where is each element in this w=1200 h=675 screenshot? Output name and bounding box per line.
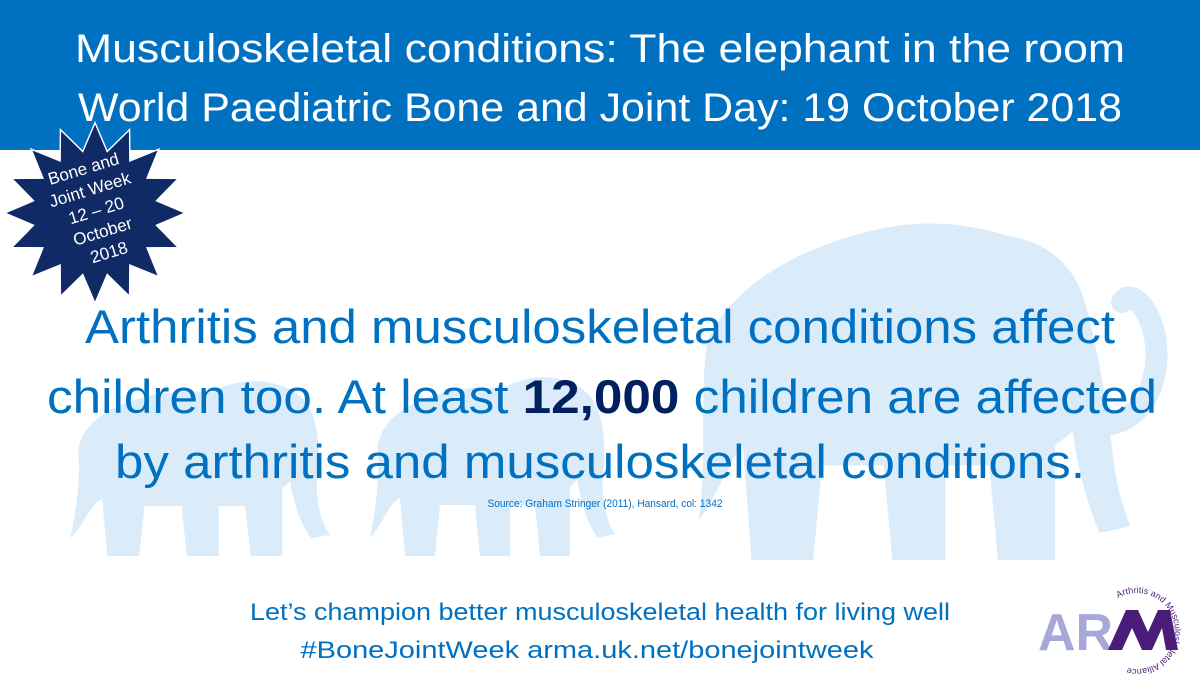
main statement: by arthritis and musculoskeletal conditions. [115,435,1085,488]
title line 1: Musculoskeletal conditions: The elephant in the room [75,27,1125,71]
badge text: Bone and [46,149,121,189]
footer text: Let’s champion better musculoskeletal health for living well [250,599,950,626]
badge text [40,147,153,274]
elephants background [70,224,1156,560]
small elephant [70,381,330,556]
badge text: 12 – 20 [66,193,126,228]
main statement: children too. At least 12,000 children are affected [47,370,1157,423]
footer text: #BoneJointWeek arma.uk.net/bonejointweek [300,637,875,664]
main statement: Arthritis and musculoskeletal conditions affect [85,300,1115,353]
badge text: Joint Week [47,168,133,211]
logo: ARMA: AR [1038,604,1113,662]
medium elephant [370,377,615,556]
badge: starburst [5,123,185,303]
footer text [250,599,950,664]
badge text: 2018 [88,238,130,267]
logo: ARMA: Arthritis and Musculoskeletal Alliance [1118,586,1182,674]
logo: ARMA [1038,586,1182,674]
big elephant [699,224,1156,560]
main statement [47,300,1157,488]
source note: Source: Graham Stringer (2011), Hansard, col: 1342 [488,498,722,510]
badge text: October [71,214,135,250]
header band [0,0,1200,150]
title line 2: World Paediatric Bone and Joint Day: 19 October 2018 [78,86,1122,130]
